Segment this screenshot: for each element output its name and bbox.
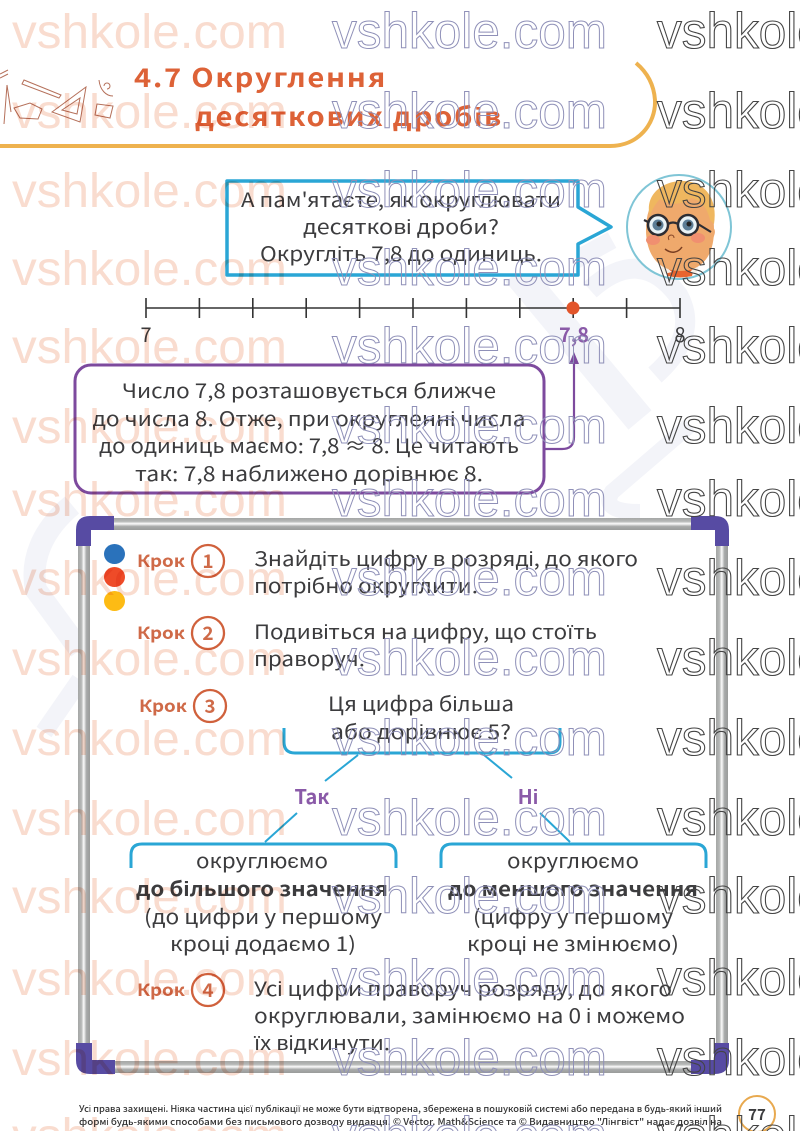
watermark: outlined violet column: vshkole.com: [332, 550, 607, 606]
callout: speech bubble: десяткові дроби?: [303, 211, 499, 240]
decision tree: [131, 728, 706, 868]
watermark: outlined violet column: vshkole.com: [332, 471, 607, 527]
branch: round down: до меншого значення: [448, 873, 698, 902]
footer legal text: [79, 1102, 722, 1128]
panel: explanation: Число 7,8 розташовується ближче: [122, 375, 496, 404]
watermark: outlined violet column: vshkole.com: [332, 83, 607, 139]
watermark: outlined violet column: vshkole.com: [332, 3, 607, 59]
watermark: orange column: vshkole.com: [12, 871, 287, 924]
branch: round down: (цифру у першому: [473, 901, 674, 930]
step 4: округлювали, замінюємо на 0 і можемо: [254, 1000, 685, 1029]
icon: boy with glasses: [627, 175, 731, 279]
step 2: праворуч.: [254, 643, 365, 672]
panel: explanation: до числа 8. Отже, при округленні числа: [92, 403, 526, 432]
board corners: [76, 516, 729, 1074]
arrow: from explanation to 7,8: [545, 352, 579, 449]
step 1: [137, 543, 638, 599]
branch: round up: [136, 845, 388, 957]
step 4: Крок: [137, 976, 186, 1001]
watermark: outlined violet column: [332, 3, 607, 1131]
step 1: Знайдіть цифру в розряді, до якого: [254, 543, 638, 572]
title: [134, 58, 503, 134]
panel: explanation: так: 7,8 наближено дорівнює 8.: [135, 458, 483, 487]
step 3: 3: [204, 692, 216, 719]
footer legal text: Усі права захищені. Ніяка частина цієї публікації не може бути відтворена, збережена в пошуковій системі або передана в будь-який інший: [79, 1102, 722, 1115]
step 2: Подивіться на цифру, що стоїть: [254, 616, 597, 645]
step 2: 2: [202, 619, 214, 646]
watermark: orange column: vshkole.com: [12, 6, 287, 59]
icon: geometry tools doodle: [0, 70, 113, 124]
watermark: outlined violet column: vshkole.com: [332, 162, 607, 218]
header ribbon: [0, 63, 655, 146]
watermark: orange column: vshkole.com: [12, 793, 287, 846]
branch: round down: [448, 845, 698, 957]
watermark: outlined violet column: vshkole.com: [332, 630, 607, 686]
number line: [140, 298, 686, 348]
watermark: orange column: vshkole.com: [12, 321, 287, 374]
watermark: orange column: vshkole.com: [12, 86, 287, 139]
panel: explanation: до одиниць маємо: 7,8 ≈ 8. Це читають: [99, 430, 519, 459]
panel: whiteboard: [76, 516, 729, 1074]
step 4: їх відкинути.: [253, 1027, 390, 1056]
watermark: outlined violet column: vshkole.com: [332, 868, 607, 924]
number line: 7: [140, 319, 152, 348]
watermark: orange column: vshkole.com: [12, 243, 287, 296]
panel: explanation: [75, 365, 544, 493]
watermark: outlined dark column: [657, 3, 800, 1131]
page number: [739, 1096, 775, 1131]
branch: round down: округлюємо: [507, 845, 639, 874]
icon: coloured magnets: [104, 544, 125, 611]
branch: round up: округлюємо: [196, 845, 328, 874]
watermark: orange column: vshkole.com: [12, 401, 287, 454]
watermark: orange column: vshkole.com: [12, 165, 287, 218]
watermark: orange column: [12, 6, 287, 1131]
callout: speech bubble: Округліть 7,8 до одиниць.: [260, 238, 542, 267]
watermark: outlined violet column: vshkole.com: [332, 790, 607, 846]
step 3: Ця цифра більша: [328, 688, 514, 717]
watermark: outlined violet column: vshkole.com: [332, 1030, 607, 1086]
watermark: outlined violet column: vshkole.com: [332, 240, 607, 296]
watermark: orange column: vshkole.com: [12, 953, 287, 1006]
branch: round up: (до цифри у першому: [144, 901, 383, 930]
step 4: Усі цифри праворуч розряду, до якого: [254, 973, 672, 1002]
step 3: або дорівнює 5?: [331, 716, 511, 745]
number line: 7,8: [559, 319, 589, 348]
watermark: outlined violet column: vshkole.com: [332, 710, 607, 766]
step 2: Крок: [137, 619, 186, 644]
page number: 77: [748, 1104, 766, 1125]
step 1: потрібно округлити.: [254, 570, 478, 599]
watermark: outlined violet column: vshkole.com: [332, 950, 607, 1006]
step 3: Крок: [139, 692, 188, 717]
background publisher mark: [34, 240, 690, 732]
callout: speech bubble: [227, 181, 611, 275]
branch: round up: кроці додаємо 1): [170, 928, 356, 957]
step 1: Крок: [137, 547, 186, 572]
watermark: orange column: vshkole.com: [12, 633, 287, 686]
watermark: orange column: vshkole.com: [12, 553, 287, 606]
branch: round down: кроці не змінюємо): [467, 928, 679, 957]
watermark: outlined violet column: vshkole.com: [332, 318, 607, 374]
decision tree: Ні: [518, 781, 538, 810]
step 3: [139, 688, 514, 745]
title: десяткових дробів: [195, 97, 503, 134]
branch: round up: до більшого значення: [136, 873, 388, 902]
decision tree: Так: [295, 781, 329, 810]
step 2: [137, 616, 597, 672]
title: 4.7 Округлення: [134, 58, 387, 95]
watermark: orange column: vshkole.com: [12, 1033, 287, 1086]
callout: speech bubble: А пам'ятаєте, як округлювати: [241, 184, 561, 213]
watermark: orange column: vshkole.com: [12, 474, 287, 527]
step 1: 1: [202, 547, 214, 574]
watermark: outlined violet column: vshkole.com: [332, 398, 607, 454]
step 4: [137, 973, 685, 1056]
step 4: 4: [202, 976, 214, 1003]
number line: 8: [674, 319, 686, 348]
watermark: orange column: vshkole.com: [12, 713, 287, 766]
footer legal text: формі будь-якими способами без письмового дозволу видавця. © Vector. Math&Science та © Видавництво "Лінгвіст" надає дозвіл на: [79, 1115, 722, 1128]
